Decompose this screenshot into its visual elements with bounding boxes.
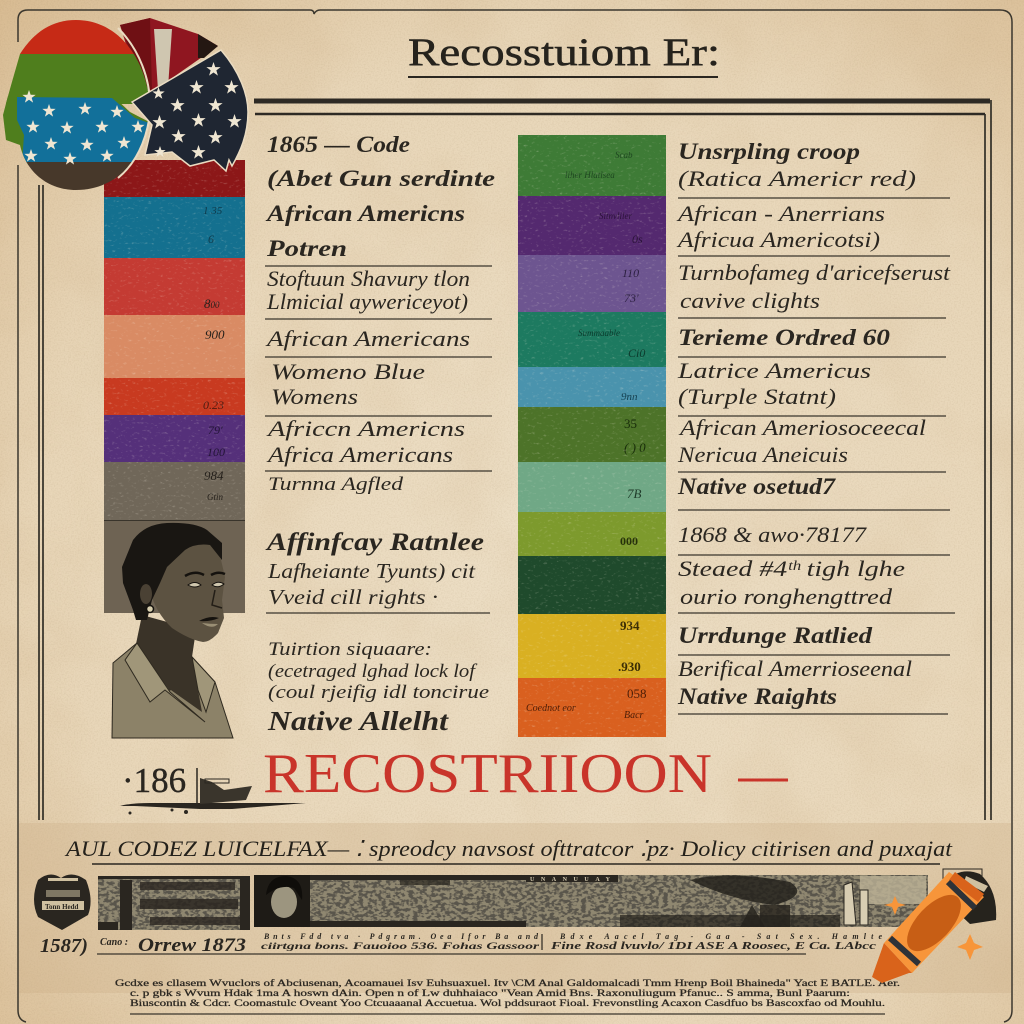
left stacked colour bar: 79' [208, 423, 223, 437]
portrait of a woman [112, 523, 233, 738]
title: Recosstuiom Er: [408, 31, 720, 74]
strip: text panel [310, 875, 526, 927]
portrait: ear [140, 584, 152, 604]
right stacked colour bar: liher Hlatlsea [565, 170, 615, 180]
left stacked colour bar [104, 160, 245, 613]
right column text: (Turple Statnt) [678, 384, 836, 409]
left seal icon [34, 874, 91, 930]
bar wear texture [100, 130, 670, 740]
engraved illustration strip [98, 875, 928, 930]
right column text: Africua Americotsi) [676, 227, 880, 252]
icon: crayon [872, 872, 984, 983]
right stacked colour bar: 7B [627, 486, 642, 501]
strip: portrait panel [254, 875, 310, 927]
year label with ornament [120, 761, 306, 814]
bottom band [19, 823, 1011, 993]
right stacked colour bar: Ci0 [628, 346, 645, 360]
left stacked colour bar: 6 [208, 232, 214, 246]
right column text: Berifical Amerrioseenal [678, 656, 912, 681]
right column text: Unsrpling croop [678, 139, 860, 164]
portrait: neck [136, 615, 202, 712]
right column text: 1868 & awo·78177 [678, 522, 867, 547]
left stacked colour bar: 800 [204, 296, 220, 311]
footer fine print: Biuscontin & Cdcr. Coomastulc Oveant Yoo Ctcuaaanal Accuetua. Wol pddsuraot Fioal. Frevonstling Acaxon Casdfuo bs Bascoxfao od Mouhlu. [130, 998, 885, 1008]
pie wedge: navy with stars [132, 50, 248, 171]
portrait: hair [122, 523, 222, 620]
left column text: Womeno Blue [271, 359, 425, 384]
left stacked colour bar: Gtin [207, 492, 224, 502]
left column text: (Abet Gun serdinte [267, 166, 495, 191]
pie wedge: striped red, green and blue [3, 20, 148, 190]
right stacked colour bar: Scab [615, 150, 633, 160]
header double rule [254, 101, 990, 114]
left column text: Africa Americans [266, 442, 453, 467]
left column text: (coul rjeifig idl toncirue [268, 682, 489, 703]
portrait: earring [146, 606, 154, 612]
right column text: ourio ronghengttred [680, 584, 893, 609]
right column text: Latrice Americus [677, 358, 871, 383]
right stacked colour bar: 73' [624, 291, 639, 305]
right column text: (Ratica Americr red) [678, 166, 916, 191]
right column text: Turnbofameg d'aricefserust [678, 260, 951, 285]
left column text: Tuirtion siquaare: [268, 639, 432, 660]
right stacked colour bar: Bacr [624, 710, 644, 721]
right stacked colour bar: 058 [627, 686, 646, 701]
right stacked colour bar: 9nn [621, 391, 638, 403]
left column text: Llmicial aywericeyot) [266, 289, 468, 314]
footer fine print: c. p gbk s Wvum Hdak 1ma A hoswn dAin. Open n of Lw duhhaiaco "Vean Amid Bns. Raxonuliugum Pfanuc.. S amma, Bunl Paarum: [130, 988, 850, 998]
left stacked colour bar: 100 [207, 445, 225, 459]
left stacked colour bar: 0.23 [203, 398, 224, 412]
right stacked colour bar: ( ) 0 [624, 440, 646, 455]
right stacked colour bar: Sitnvliler [599, 211, 632, 221]
left column text: African Americans [265, 326, 470, 351]
caption row: Orrew 1873 [138, 935, 246, 956]
right column text: Terieme Ordred 60 [678, 325, 891, 350]
engraved illustration strip: UNANUUAY [530, 877, 611, 883]
left column text: Turnna Agfled [268, 474, 404, 495]
pie chart emblem [0, 18, 248, 192]
right column text: Native osetud7 [677, 474, 837, 499]
year label with ornament: ·186 [122, 761, 186, 800]
right stacked colour bar [518, 135, 666, 737]
strip: building rows [98, 876, 250, 930]
right column text: African - Anerrians [676, 201, 885, 226]
right stacked colour bar: Summaable [578, 328, 620, 338]
right column text: cavive clights [680, 288, 820, 313]
left stacked colour bar: 900 [205, 327, 225, 342]
caption row: Fine Rosd lvuvlo/ 1DI ASE A Roosec, E Ca. LAbcc [549, 941, 877, 952]
right column text: Urrdunge Ratlied [678, 623, 873, 648]
red banner title: RECOSTRIIOON [263, 743, 712, 805]
left column text: Affinfcay Ratnlee [265, 529, 484, 556]
left column text [265, 132, 495, 736]
left column text: Potren [266, 236, 347, 261]
strip: tree scene [620, 875, 840, 927]
icon: sparkle small [884, 896, 906, 915]
portrait: face [150, 542, 225, 642]
footer fine print [115, 978, 900, 1014]
right stacked colour bar: .930 [618, 659, 641, 674]
right column text: Native Raights [677, 684, 837, 709]
right stacked colour bar: 0s [632, 232, 643, 246]
left column text: Lafheiante Tyunts) cit [267, 559, 476, 583]
left column text: Africcn Americns [265, 416, 465, 441]
right stacked colour bar: Coednot eor [526, 703, 576, 714]
left column text: Native Allelht [267, 706, 450, 736]
right column text: Steaed #4ᵗʰ tigh lghe [678, 556, 905, 581]
right column text: African Ameriosoceecal [678, 415, 926, 440]
portrait: eyes, nose and mouth [185, 573, 225, 627]
portrait: collar [125, 643, 215, 722]
icon: sparkle large [957, 934, 983, 960]
right column text [676, 139, 955, 714]
left column text: African Americns [265, 201, 465, 226]
caption row [97, 932, 882, 956]
portrait: shirt [112, 643, 233, 738]
right stacked colour bar: 35 [624, 416, 637, 431]
caption row: Cano : [100, 937, 128, 948]
caption row: Bdxe Aacel Tag - Gaa - Sat Sex. Hamlte [559, 932, 882, 941]
footer fine print: Gcdxe es cllasem Wvuclors of Abciusenan, Acoamauei Isv Euhsuaxuel. Itv \CM Anal Galdomalcadi Tmm Hrenp Boil Bhaineda" Yact E BATLE. Aer. [115, 978, 900, 988]
right seal icon [943, 869, 996, 924]
left column text: Vveid cill rights · [268, 585, 438, 609]
caption row: ciirtgna bons. Fauoioo 536. Fohas Gassoor [261, 941, 540, 951]
left column text: Womens [271, 384, 358, 409]
right column text: Nericua Aneicuis [677, 442, 848, 467]
left column text: (ecetraged lghad lock lof [268, 661, 478, 682]
script subtitle: AUL CODEZ LUICELFAX— ⁚ spreodcy navsost ofttratcor ⁚pz· Dolicy citirisen and puxajat [64, 836, 953, 861]
pie wedge: dark red with torn stripe [120, 18, 218, 92]
left column text: 1865 — Code [267, 132, 410, 157]
right stacked colour bar: 934 [620, 618, 640, 633]
left year label: 1587) [40, 935, 88, 957]
caption row: Bnts Fdd tva · Pdgram. Oea Ifor Ba and [263, 932, 539, 941]
left seal icon: Tonn Hedd [45, 903, 79, 911]
right stacked colour bar: 110 [622, 266, 639, 280]
right stacked colour bar: 000 [620, 534, 638, 548]
left stacked colour bar: 1 35 [203, 205, 223, 217]
left stacked colour bar: 984 [204, 468, 224, 483]
left column text: Stoftuun Shavury tlon [267, 266, 470, 291]
